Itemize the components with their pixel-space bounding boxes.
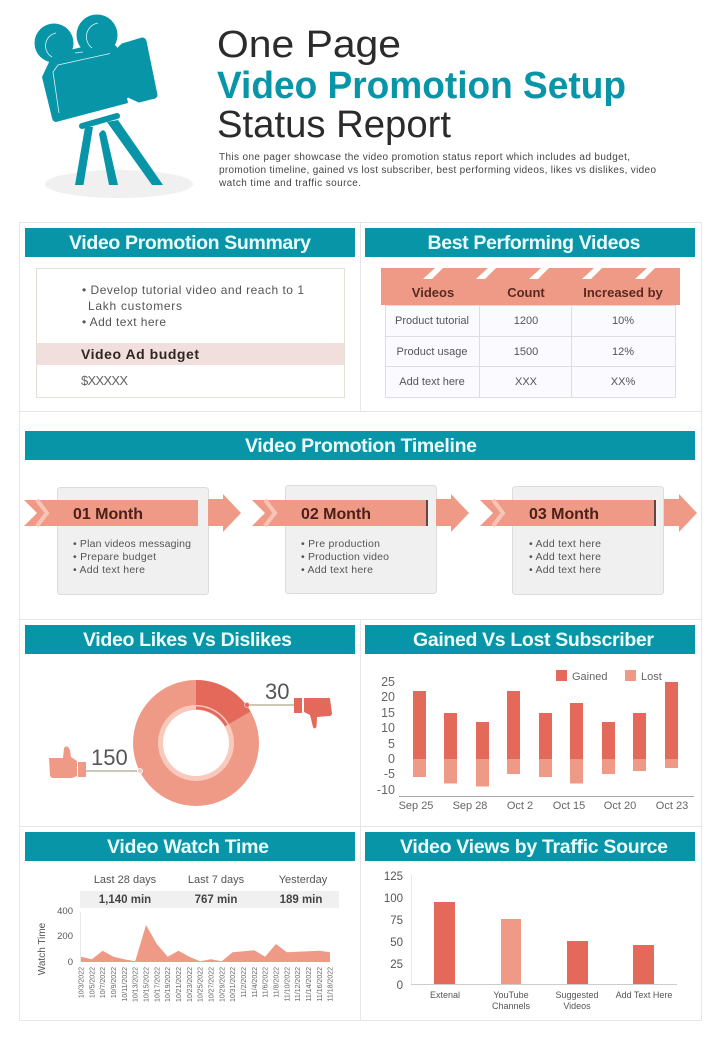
panel: video watch time (25, 832, 355, 1002)
table: best performing videos: Count (507, 285, 545, 300)
stacked bar chart: subscribers: -10 (377, 783, 395, 797)
summary box: Lakh customers (88, 299, 182, 313)
timeline step: 03 month (480, 486, 697, 594)
panel: video views by traffic source (365, 832, 695, 1011)
callout: dislikes 30: 30 (265, 679, 289, 704)
stacked bar chart: subscribers (377, 675, 694, 812)
area chart: watch time: 10/27/2022 (208, 967, 216, 1002)
stacked bar chart: subscribers: Oct 15 (553, 800, 585, 812)
timeline step: 02 month: • Pre production (301, 538, 380, 550)
heading: video likes vs dislikes: Video Likes Vs Dislikes (83, 629, 292, 651)
summary box (36, 268, 344, 398)
bar chart: traffic source: Add Text Here (616, 990, 672, 1000)
table: best performing videos: Add text here (399, 376, 465, 388)
callout: likes 150: 150 (91, 745, 128, 770)
callout: dislikes 30 (244, 679, 294, 708)
heading: video likes vs dislikes (25, 625, 355, 654)
watch time summary: 189 min (280, 894, 322, 906)
summary box: Video Ad budget (81, 346, 199, 362)
heading: video promotion timeline (25, 431, 695, 460)
heading: video watch time (25, 832, 355, 861)
bar chart: traffic source: Channels (492, 1001, 531, 1011)
bar chart: traffic source: Videos (563, 1001, 591, 1011)
area chart: watch time: 11/10/2022 (284, 967, 291, 1002)
summary box: • Add text here (82, 315, 166, 329)
area chart: watch time: 10/31/2022 (230, 967, 237, 1002)
title: Status Report (217, 104, 451, 146)
area chart: watch time: 10/7/2022 (100, 967, 107, 998)
table: best performing videos: 10% (612, 315, 634, 327)
summary box: • Develop tutorial video and reach to 1 (82, 283, 304, 297)
watch time summary: Last 28 days (94, 874, 157, 886)
timeline step: 03 month: 03 Month (529, 506, 599, 523)
icon: thumbs up (49, 746, 86, 778)
watch time summary: Yesterday (279, 874, 328, 886)
heading: video promotion timeline: Video Promotion Timeline (245, 435, 477, 457)
area chart: watch time: 11/14/2022 (306, 967, 313, 1002)
summary box: $XXXXX (81, 373, 128, 388)
heading: gained vs lost subscriber (365, 625, 695, 654)
timeline step: 02 month: • Add text here (301, 564, 373, 576)
table: best performing videos: Videos (412, 285, 454, 300)
area chart: watch time: 11/12/2022 (295, 967, 302, 1002)
title: Video Promotion Setup (217, 65, 626, 107)
stacked bar chart: subscribers: 15 (381, 706, 395, 720)
bar chart: traffic source: Suggested (555, 990, 599, 1000)
table: best performing videos: 12% (612, 346, 634, 358)
area chart: watch time: 11/16/2022 (317, 967, 324, 1002)
area chart: watch time: Watch Time (37, 922, 48, 975)
title: One Page (217, 24, 401, 66)
timeline step: 02 month (252, 486, 469, 594)
heading: video views by traffic source (365, 832, 695, 861)
stacked bar chart: subscribers: 20 (381, 690, 395, 704)
stacked bar chart: subscribers: Oct 23 (656, 800, 688, 812)
timeline step: 01 month (24, 488, 241, 594)
timeline step: 03 month: • Add text here (529, 551, 601, 563)
timeline step: 01 month: 01 Month (73, 506, 143, 523)
area chart: watch time: 200 (57, 931, 73, 942)
table: best performing videos (381, 268, 680, 398)
panel: best performing videos (365, 228, 695, 398)
timeline step: 01 month: • Plan videos messaging (73, 538, 191, 550)
area chart: watch time: 10/13/2022 (133, 967, 140, 1002)
icon: thumbs down (294, 698, 332, 728)
heading: video promotion summary: Video Promotion Summary (69, 232, 311, 254)
heading: best performing videos (365, 228, 695, 257)
area chart: watch time: 10/21/2022 (176, 967, 183, 1002)
panel: video promotion summary (25, 228, 355, 398)
stacked bar chart: subscribers: 0 (388, 752, 395, 766)
table: best performing videos: Product tutorial (395, 315, 469, 327)
area chart: watch time: 10/9/2022 (111, 967, 118, 998)
table: best performing videos: Product usage (397, 346, 467, 358)
legend: Gained (572, 671, 607, 683)
panel: video promotion timeline (24, 431, 697, 594)
area chart: watch time: 10/25/2022 (198, 967, 205, 1002)
heading: video watch time: Video Watch Time (107, 836, 269, 858)
watch time summary: 1,140 min (99, 894, 151, 906)
panel: video likes vs dislikes (25, 625, 355, 806)
area chart: watch time: 400 (57, 906, 73, 917)
heading: video promotion summary (25, 228, 355, 257)
bar chart: traffic source: 75 (390, 915, 403, 927)
area chart: watch time: 11/18/2022 (328, 967, 334, 1002)
area chart: watch time: 0 (68, 957, 73, 968)
area chart: watch time: 10/19/2022 (165, 967, 172, 1002)
area chart: watch time: 11/2/2022 (241, 967, 248, 998)
area chart: watch time: 10/29/2022 (219, 967, 226, 1002)
page frame (19, 222, 702, 1021)
stacked bar chart: subscribers: Oct 20 (604, 800, 636, 812)
stacked bar chart: subscribers: -5 (384, 767, 395, 781)
area chart: watch time: 10/15/2022 (144, 967, 150, 1002)
bar chart: traffic source: 50 (390, 937, 403, 949)
area chart: watch time: 10/3/2022 (78, 967, 86, 998)
heading: best performing videos: Best Performing Videos (428, 232, 641, 254)
timeline step: 02 month: • Production video (301, 551, 389, 563)
table: best performing videos: XX% (611, 376, 635, 388)
stacked bar chart: subscribers: Oct 2 (507, 800, 533, 812)
icon: video camera on tripod (34, 14, 193, 198)
heading: video views by traffic source: Video Views by Traffic Source (400, 836, 668, 858)
watch time summary: 767 min (195, 894, 237, 906)
intro text: watch time and traffic source. (218, 178, 361, 189)
timeline step: 03 month: • Add text here (529, 538, 601, 550)
table: best performing videos: XXX (515, 376, 538, 388)
area chart: watch time: 11/6/2022 (263, 967, 270, 998)
legend (556, 670, 662, 683)
watch time summary (80, 874, 339, 908)
donut chart: likes vs dislikes (133, 680, 259, 806)
stacked bar chart: subscribers: Sep 25 (399, 800, 433, 812)
area chart: watch time (37, 906, 334, 1002)
area chart: watch time: 10/23/2022 (187, 967, 194, 1002)
bar chart: traffic source: 25 (390, 959, 403, 971)
bar chart: traffic source: 100 (384, 893, 403, 905)
stacked bar chart: subscribers: 5 (388, 737, 395, 751)
heading: gained vs lost subscriber: Gained Vs Lost Subscriber (413, 629, 654, 651)
callout: likes 150 (86, 745, 142, 774)
panel: gained vs lost subscriber (365, 625, 695, 812)
table: best performing videos: Increased by (583, 285, 664, 300)
bar chart: traffic source: 0 (397, 980, 403, 992)
legend: Lost (641, 671, 662, 683)
table: best performing videos: 1500 (514, 346, 538, 358)
area chart: watch time: 11/4/2022 (252, 967, 259, 998)
area chart: watch time: 10/11/2022 (122, 967, 129, 1002)
timeline step: 02 month: 02 Month (301, 506, 371, 523)
intro text: This one pager showcase the video promotion status report which includes ad budget, (219, 152, 630, 163)
stacked bar chart: subscribers: 25 (381, 675, 395, 689)
timeline step: 01 month: • Prepare budget (73, 551, 156, 563)
intro text: promotion timeline, gained vs lost subscriber, best performing videos, likes vs dislikes, video (219, 165, 656, 176)
bar chart: traffic source: YouTube (493, 990, 529, 1000)
watch time summary: Last 7 days (188, 874, 245, 886)
stacked bar chart: subscribers: Sep 28 (453, 800, 487, 812)
bar chart: traffic source (384, 871, 677, 1011)
timeline step: 01 month: • Add text here (73, 564, 145, 576)
bar chart: traffic source: 125 (384, 871, 403, 883)
stacked bar chart: subscribers: 10 (381, 721, 395, 735)
timeline step: 03 month: • Add text here (529, 564, 601, 576)
bar chart: traffic source: Extenal (430, 990, 460, 1000)
table: best performing videos: 1200 (514, 315, 538, 327)
area chart: watch time: 10/17/2022 (154, 967, 161, 1002)
title (217, 24, 626, 146)
area chart: watch time: 10/5/2022 (89, 967, 96, 998)
area chart: watch time: 11/8/2022 (274, 967, 280, 998)
intro text (218, 152, 656, 189)
